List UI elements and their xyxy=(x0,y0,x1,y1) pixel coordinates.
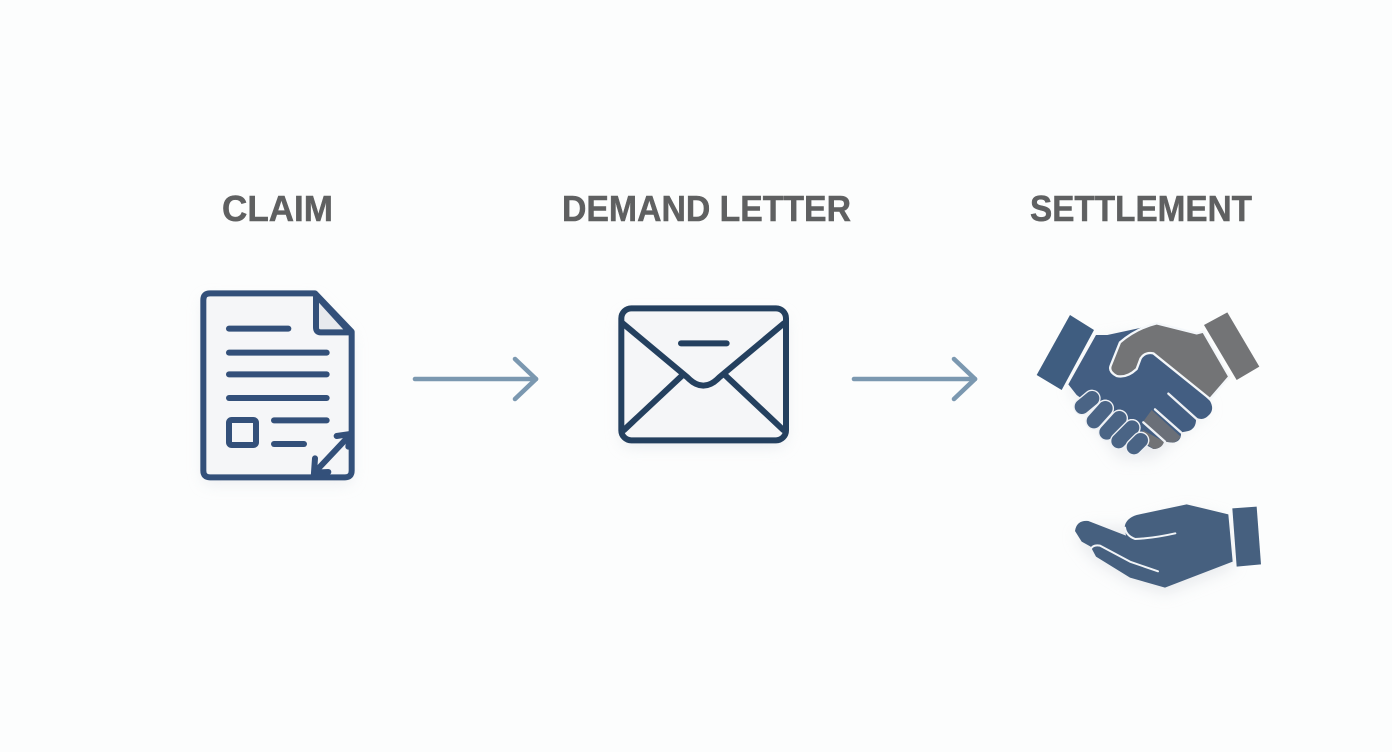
blue hand xyxy=(1068,328,1212,449)
left cuff xyxy=(1037,315,1094,390)
palm lines xyxy=(1091,528,1175,571)
icon: handshake xyxy=(1037,312,1259,458)
palm xyxy=(1075,504,1233,588)
arrow: claim to demand letter xyxy=(415,359,536,399)
grey hand xyxy=(1110,323,1229,399)
icon: envelope xyxy=(621,308,786,447)
knuckles xyxy=(1082,398,1141,447)
arrow: demand letter to settlement xyxy=(854,359,975,399)
finger gaps xyxy=(1143,394,1197,442)
icon: claim document xyxy=(203,293,352,483)
heading: demand letter: DEMAND LETTER xyxy=(562,188,851,229)
heading: settlement: SETTLEMENT xyxy=(1030,188,1252,229)
heading: claim: CLAIM xyxy=(222,188,333,229)
right cuff xyxy=(1204,312,1259,380)
icon: open hand xyxy=(1075,504,1261,594)
cuff xyxy=(1232,507,1261,567)
